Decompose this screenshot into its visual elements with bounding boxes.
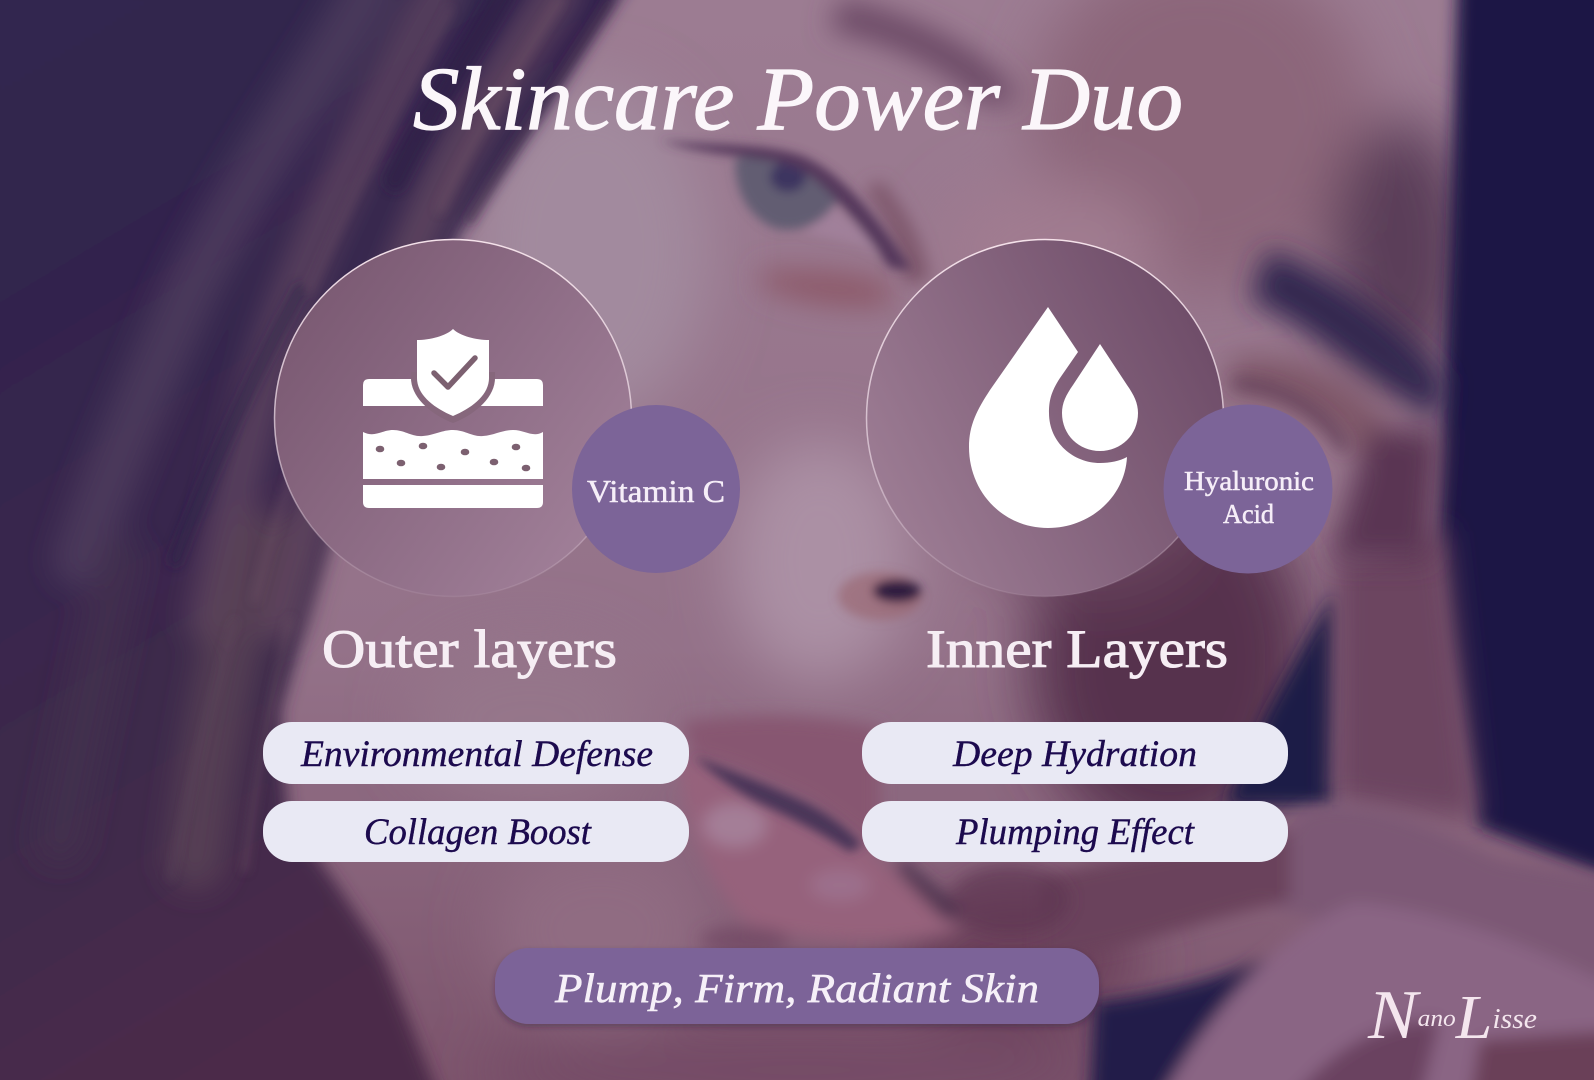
pill: plumping effect [862,801,1288,862]
badge: Hyaluronic Acid: Hyaluronic [1184,466,1314,496]
lips [683,716,880,850]
pill: collagen boost [263,801,689,862]
result pill: Plump, Firm, Radiant Skin [554,965,1039,1011]
pill: deep hydration: Deep Hydration [952,734,1197,775]
circle: inner layers [866,240,1224,596]
eye [805,207,905,268]
hair left [0,0,630,1080]
logo: NanoLisse: ano [1418,1006,1456,1032]
pill: environmental defense: Environmental Defense [300,734,653,775]
pill: environmental defense [263,722,689,784]
face features [760,0,1445,560]
result pill [495,948,1099,1024]
nostril [838,572,922,620]
pill: deep hydration [862,722,1288,784]
hair strands [60,0,560,860]
logo: NanoLisse: N [1367,977,1421,1054]
badge: Hyaluronic Acid: Acid [1223,499,1274,529]
icon: skin layers with shield [363,329,543,508]
icon: water drops [969,307,1138,528]
badge: Hyaluronic Acid [1164,404,1332,574]
heading: outer layers: Outer layers [322,619,617,679]
logo: NanoLisse: L [1455,984,1492,1052]
logo: NanoLisse: isse [1492,1004,1537,1035]
badge: Vitamin C [572,405,740,573]
right dark hair and arm [1225,0,1594,880]
pill: plumping effect: Plumping Effect [955,812,1196,853]
heading: inner layers: Inner Layers [926,619,1228,679]
pill: collagen boost: Collagen Boost [364,812,593,853]
title: Skincare Power Duo [413,50,1183,149]
badge: Vitamin C: Vitamin C [587,473,725,509]
